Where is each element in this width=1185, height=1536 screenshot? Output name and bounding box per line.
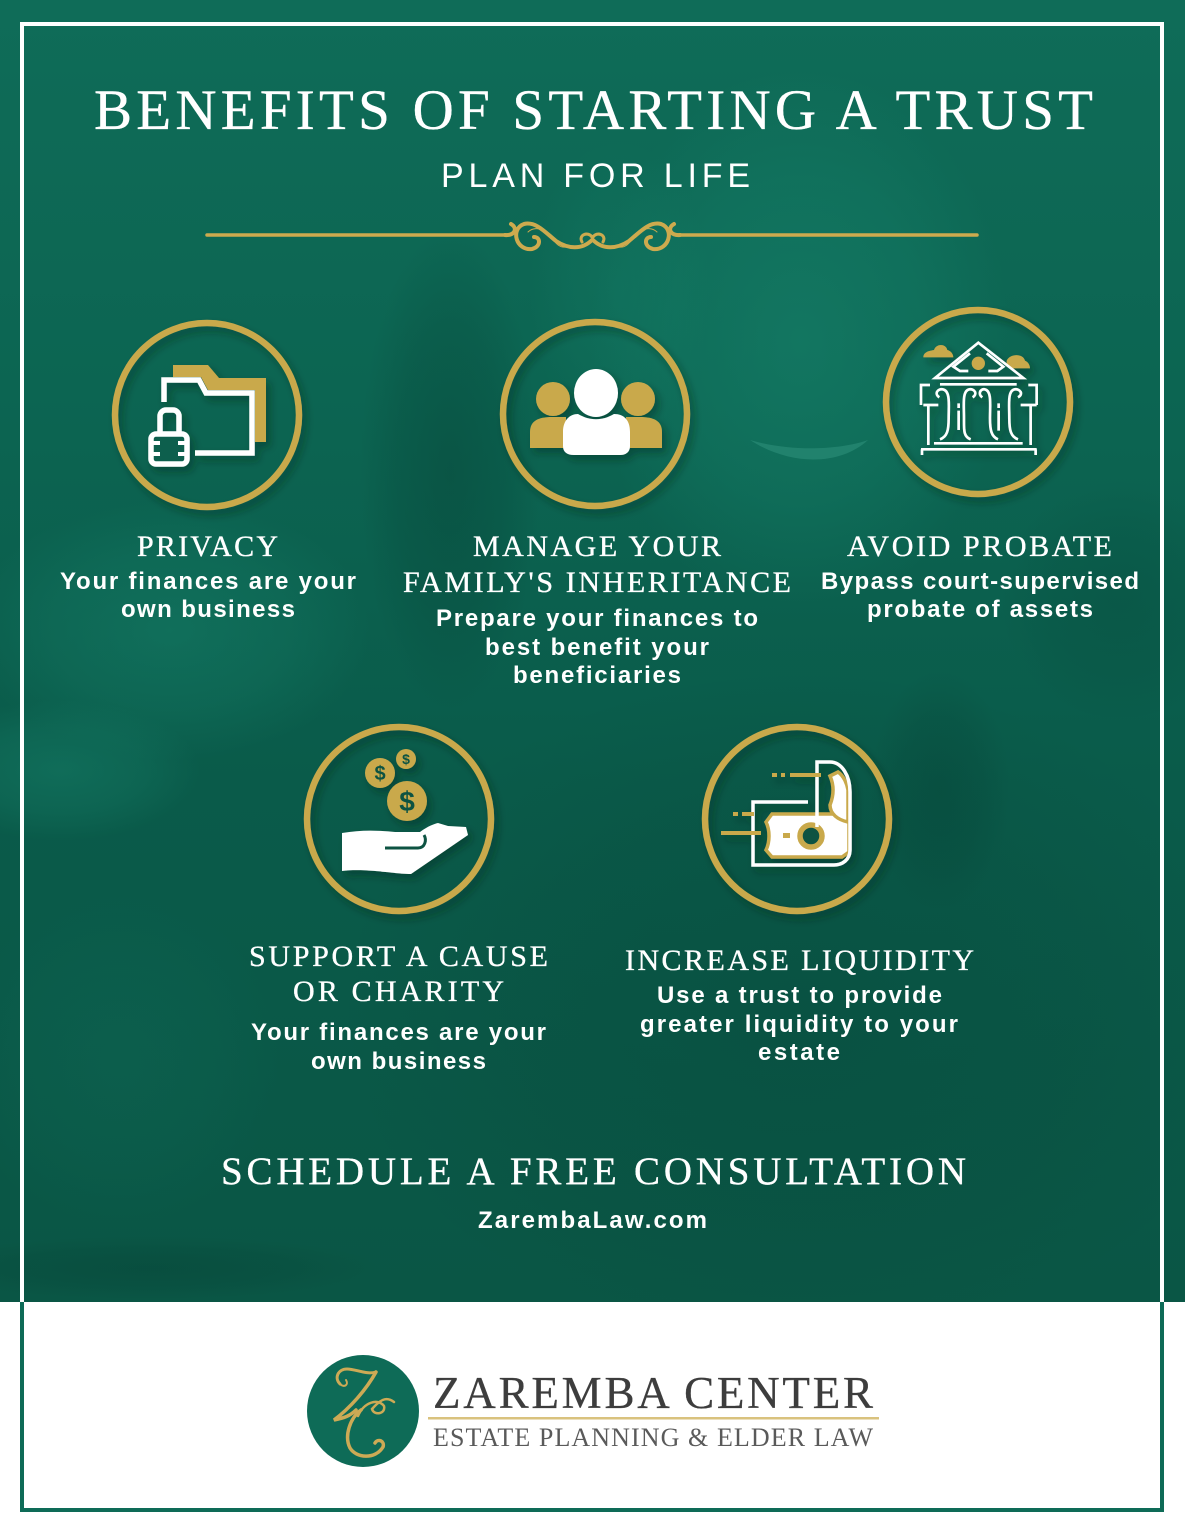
- logo wordmark: ZAREMBA CENTER: [433, 1368, 873, 1418]
- text block: increase liquidity: Use a trust to provide: [657, 982, 942, 1009]
- icon: money transfer: [705, 727, 889, 911]
- icon: family group: [503, 322, 687, 506]
- subtitle: PLAN FOR LIFE: [441, 157, 750, 195]
- text block: increase liquidity: [625, 944, 974, 1066]
- icon: privacy folder and lock: [115, 323, 299, 507]
- white footer panel: [0, 1302, 1185, 1536]
- text block: support a cause or charity: own business: [311, 1048, 486, 1075]
- text block: avoid probate: AVOID PROBATE: [847, 530, 1112, 563]
- text block: support a cause or charity: [249, 940, 548, 1075]
- text block: manage your family's inheritance: Prepare your finances to: [436, 605, 758, 632]
- text block: privacy: [60, 530, 356, 623]
- frame border lower: [22, 1302, 1162, 1510]
- text block: avoid probate: probate of assets: [867, 596, 1093, 623]
- text block: privacy: own business: [121, 596, 295, 623]
- text block: support a cause or charity: SUPPORT A CAUSE: [249, 940, 548, 973]
- text block: increase liquidity: greater liquidity to your: [640, 1011, 958, 1038]
- logo tagline: ESTATE PLANNING & ELDER LAW: [433, 1423, 873, 1452]
- text block: manage your family's inheritance: [403, 530, 791, 689]
- icon: hand with coins: [307, 727, 491, 911]
- text block: support a cause or charity: Your finances are your: [251, 1019, 546, 1046]
- icon: courthouse: [886, 310, 1070, 494]
- text block: privacy: Your finances are your: [60, 568, 356, 595]
- icon: hand with coins: $: [374, 763, 386, 785]
- text block: privacy: PRIVACY: [137, 530, 278, 563]
- text block: increase liquidity: estate: [758, 1039, 840, 1066]
- text block: manage your family's inheritance: best benefit your: [485, 634, 709, 661]
- icon: hand with coins: $: [402, 751, 410, 767]
- ornamental divider: [207, 224, 977, 249]
- text block: manage your family's inheritance: MANAGE YOUR: [473, 530, 721, 563]
- text block: avoid probate: [821, 530, 1139, 623]
- logo: [307, 1355, 879, 1467]
- text block: increase liquidity: INCREASE LIQUIDITY: [625, 944, 974, 977]
- text block: manage your family's inheritance: FAMILY'S INHERITANCE: [403, 566, 791, 599]
- text block: support a cause or charity: OR CHARITY: [293, 975, 504, 1008]
- text block: manage your family's inheritance: beneficiaries: [513, 662, 681, 689]
- logo emblem: [307, 1355, 419, 1467]
- title: BENEFITS OF STARTING A TRUST: [94, 79, 1093, 142]
- icon: hand with coins: $: [399, 786, 415, 817]
- logo rule: [428, 1417, 879, 1420]
- text block: avoid probate: Bypass court-supervised: [821, 568, 1139, 595]
- website link: ZarembaLaw.com: [478, 1207, 707, 1234]
- call to action: SCHEDULE A FREE CONSULTATION: [221, 1150, 966, 1193]
